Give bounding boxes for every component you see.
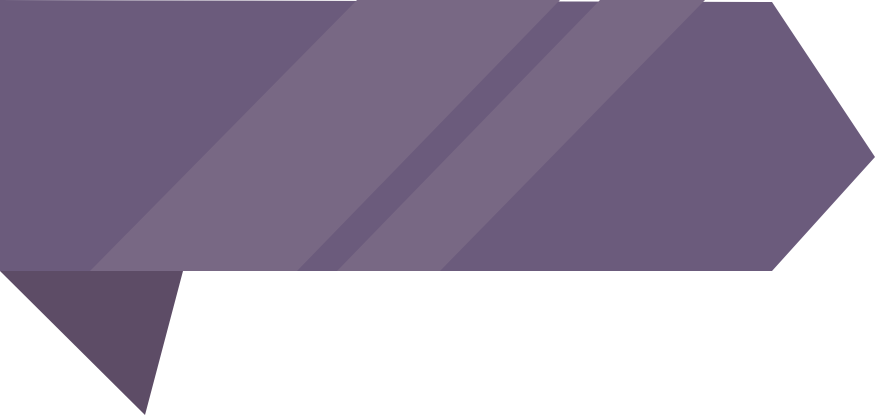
main arrow banner (0, 0, 875, 271)
light stripe 2 (337, 0, 705, 271)
fold triangle (0, 271, 183, 415)
light stripe 1 (90, 0, 560, 271)
